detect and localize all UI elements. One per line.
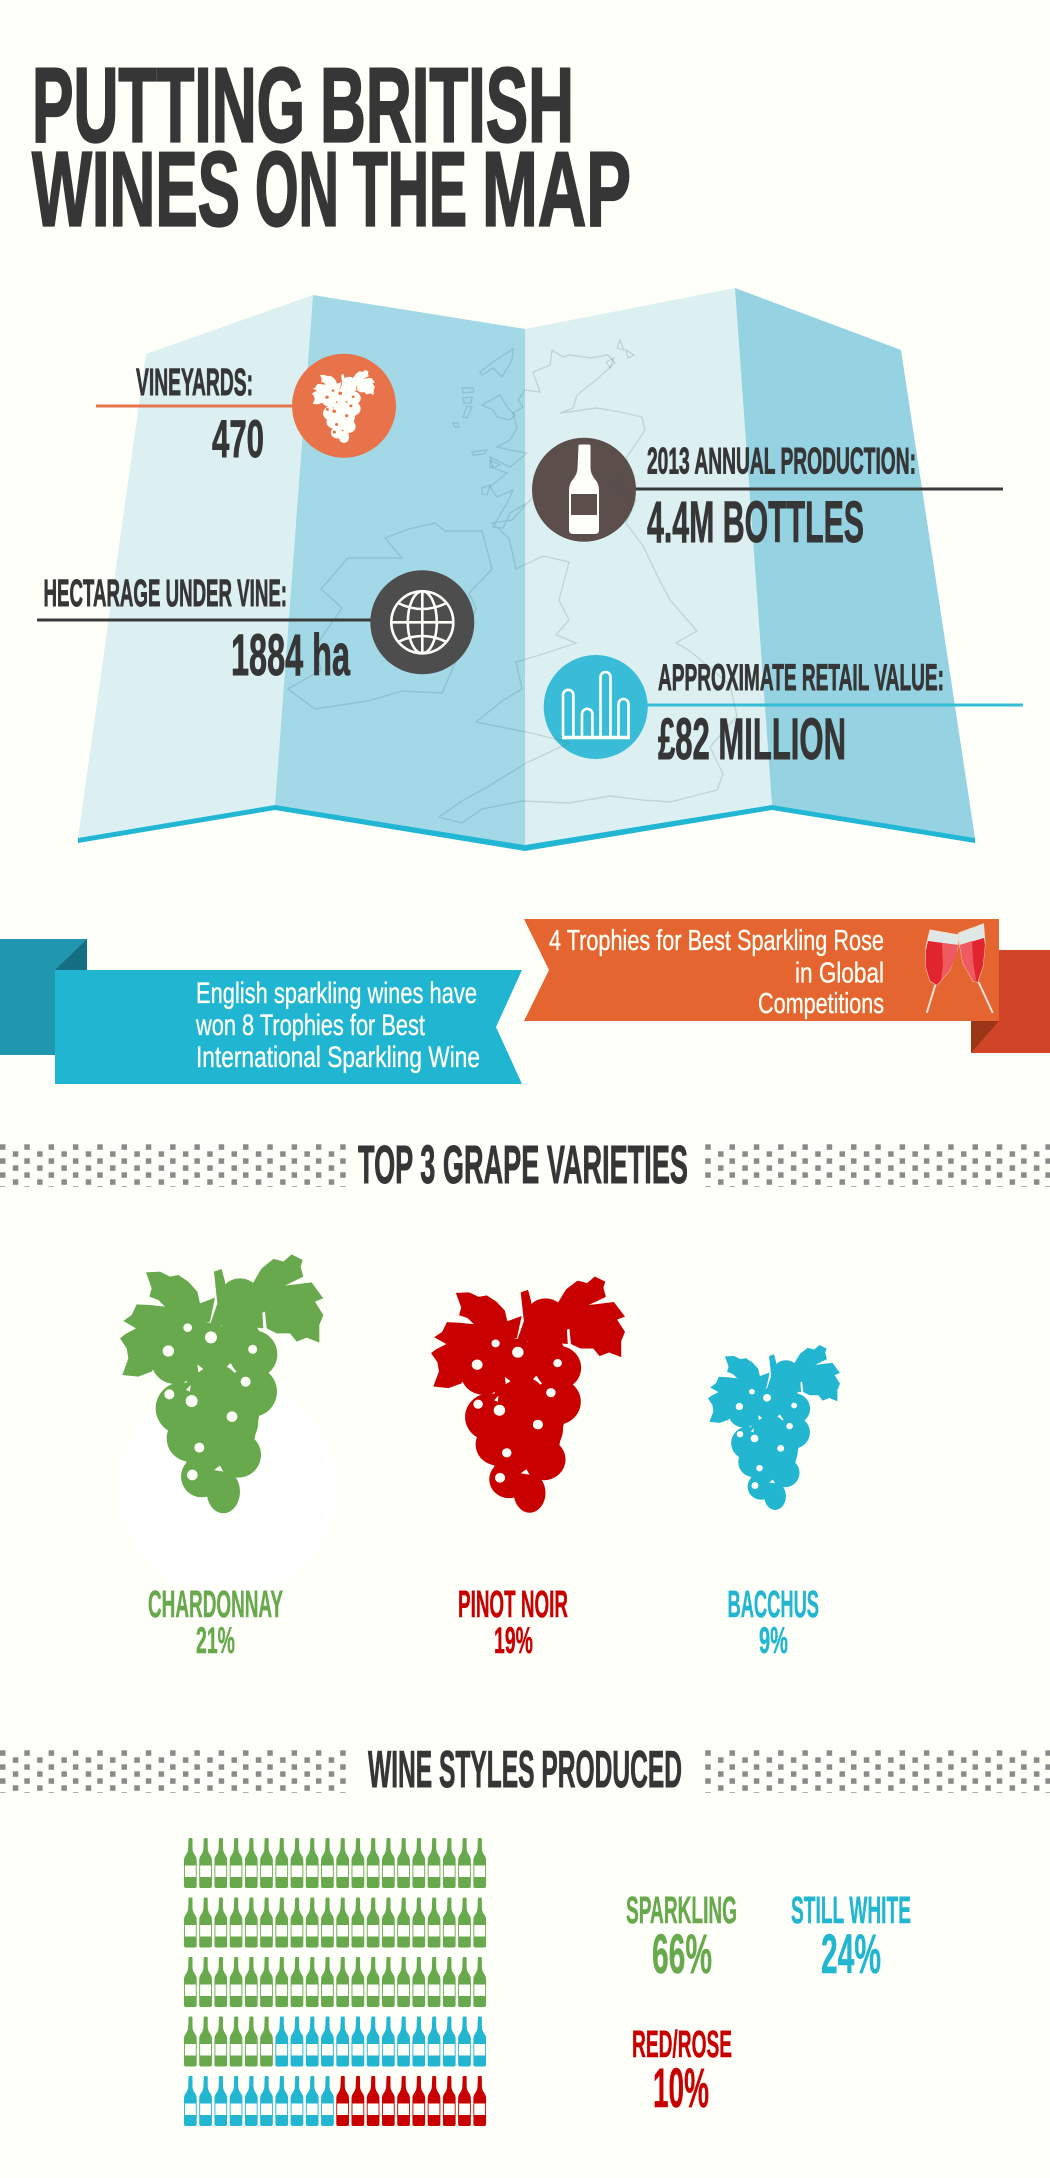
banner: English sparkling wines <box>0 939 522 1084</box>
stat: retail value <box>658 657 944 772</box>
stat: sparkling 66%: 66% <box>652 1922 712 1985</box>
title: BRITISH <box>320 46 574 164</box>
heading: top 3 grape varieties: TOP 3 GRAPE VARIETIES <box>358 1135 688 1195</box>
map outline: United Kingdom and Ireland <box>288 340 737 823</box>
stat: annual production <box>647 440 916 555</box>
stat: still white 24%: STILL WHITE <box>791 1890 911 1932</box>
label: pinot noir 19% <box>458 1584 568 1661</box>
banner: sparkling rose trophies: 4 Trophies for Best Sparkling Rose <box>549 925 884 957</box>
stat: retail value: £82 MILLION <box>658 707 846 772</box>
stat: red and rose 10% <box>632 2024 732 2119</box>
banner: English sparkling wines: English sparkling wines have <box>196 977 477 1010</box>
stat: still white 24% <box>791 1890 911 1985</box>
text: PINOT NOIR <box>458 1584 568 1626</box>
icon: bacchus grape bunch <box>708 1345 840 1510</box>
label: chardonnay 21%: 21% <box>196 1620 235 1661</box>
label: chardonnay 21% <box>148 1584 283 1661</box>
icon: two wine glasses <box>926 924 993 1013</box>
stat: sparkling 66%: SPARKLING <box>626 1890 737 1932</box>
heading: wine styles produced <box>0 1741 1050 1799</box>
banner: sparkling rose trophies: Competitions <box>758 988 884 1020</box>
heading: wine styles produced: WINE STYLES PRODUCED <box>368 1741 682 1799</box>
title: PUTTING <box>32 46 305 164</box>
stat: hectarage <box>44 573 350 688</box>
stat: sparkling 66% <box>626 1890 737 1985</box>
title: WINES <box>32 130 240 248</box>
title: ON <box>255 130 339 248</box>
stat: red and rose 10%: RED/ROSE <box>632 2024 732 2066</box>
text: CHARDONNAY <box>148 1584 283 1626</box>
icon: hectarage circle with globe <box>37 570 474 674</box>
title: THE <box>353 130 467 248</box>
icon: pinot noir grape bunch <box>431 1277 625 1513</box>
label: bacchus 9%: 9% <box>759 1620 788 1661</box>
stat: vineyards <box>136 362 264 469</box>
banner: sparkling rose trophies: in Global <box>795 958 884 990</box>
heading: top 3 grape varieties <box>0 1135 1050 1195</box>
banner: English sparkling wines: won 8 Trophies for Best <box>195 1009 425 1042</box>
label: pinot noir 19%: 19% <box>494 1620 533 1661</box>
panel: folded map <box>78 288 975 851</box>
stat: still white 24%: 24% <box>821 1922 881 1985</box>
chart: bottle pictogram <box>184 1838 486 2126</box>
stat: hectarage: 1884 ha <box>231 623 350 688</box>
label: bacchus 9% <box>728 1584 819 1661</box>
icon: retail value circle with bar chart <box>544 655 1023 759</box>
text: BACCHUS <box>728 1584 819 1626</box>
banner: English sparkling wines: International Sparkling Wine <box>196 1041 480 1074</box>
title: MAP <box>482 130 631 248</box>
stat: hectarage: HECTARAGE UNDER VINE: <box>44 573 287 615</box>
stat: red and rose 10%: 10% <box>653 2056 709 2119</box>
chart backdrop: faint circle behind chardonnay <box>120 1380 336 1596</box>
stat: vineyards: 470 <box>212 410 264 469</box>
icon: production circle with bottle <box>532 438 1003 542</box>
icon: vineyards orange circle with grapes <box>96 354 396 458</box>
banner: sparkling rose trophies <box>524 919 1050 1053</box>
stat: vineyards: VINEYARDS: <box>136 362 253 404</box>
icon: chardonnay grape bunch <box>120 1254 323 1513</box>
title <box>32 46 631 248</box>
